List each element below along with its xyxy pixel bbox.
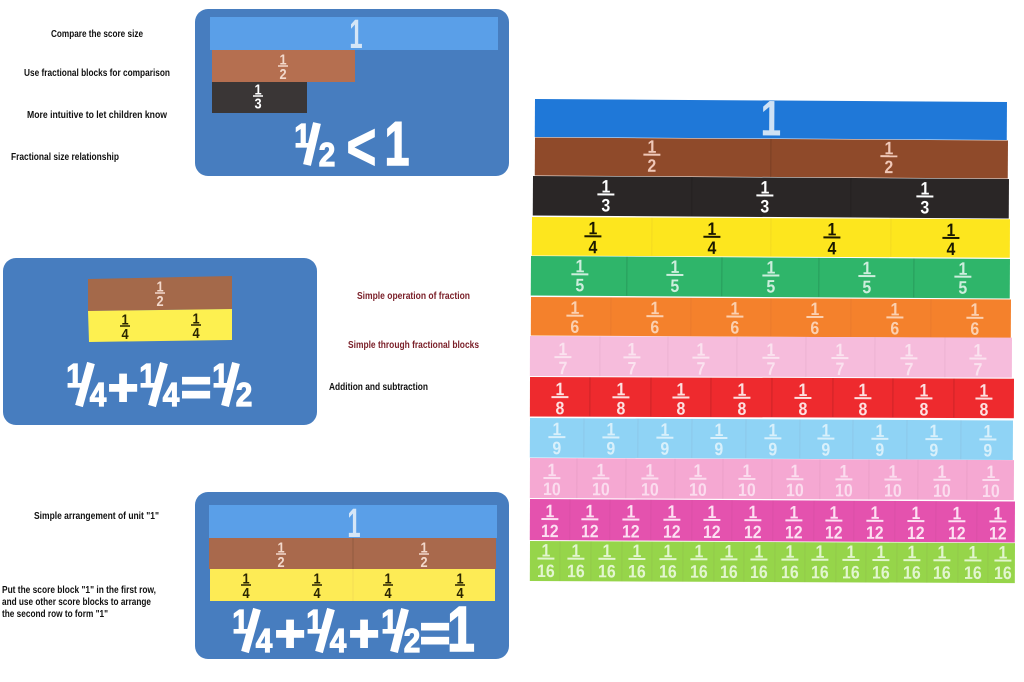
row: sixteenths: 1	[847, 542, 855, 562]
equation: sum equals one: 2	[404, 623, 420, 659]
bar: one half: 1	[279, 52, 287, 68]
row: twelfths: 12	[703, 522, 721, 542]
row: ninths: 1	[821, 421, 830, 441]
row: fifths	[531, 256, 1010, 299]
row: twelfths: 1	[789, 502, 798, 523]
row: whole	[535, 90, 1007, 148]
row: tenths: 1	[839, 461, 848, 482]
row: sixteenths: 1	[725, 541, 733, 562]
equation: sum equals one: 1	[381, 604, 398, 640]
label: more intuitive: More intuitive to let children know	[27, 110, 167, 121]
row: sixths: 1	[970, 300, 979, 320]
equation: sum equals one: +	[275, 605, 305, 663]
row: halves: 1	[884, 138, 893, 158]
row: sixteenths: 16	[690, 562, 708, 582]
equation: quarter plus quarter equals half: =	[181, 359, 211, 417]
row: sixths: 6	[890, 318, 899, 339]
row: twelfths: 1	[748, 502, 757, 522]
row: twelfths: 1	[545, 501, 554, 521]
row: ninths: 1	[875, 421, 884, 441]
bar: two quarters: 4	[121, 326, 129, 342]
row: eighths: 1	[799, 380, 807, 400]
row: sixteenths: 16	[994, 563, 1012, 583]
row: sixteenths: 16	[720, 562, 738, 582]
row: tenths: 1	[888, 462, 897, 482]
row: sixths: 1	[570, 298, 579, 318]
row: twelfths: 12	[622, 522, 640, 542]
equation: sum equals one: 1	[447, 594, 475, 665]
row: eighths: 8	[798, 399, 807, 419]
equation: half less than 1	[294, 109, 409, 184]
equation: quarter plus quarter equals half: 2	[236, 377, 252, 413]
row: sixths: 6	[650, 317, 659, 337]
row: eighths: 8	[616, 398, 625, 419]
row: ninths: 9	[929, 440, 938, 460]
bar: unit 1	[210, 13, 498, 58]
row: halves: 2	[884, 157, 893, 177]
row: ninths: 9	[768, 439, 777, 460]
row: twelfths: 12	[541, 521, 559, 541]
row: sevenths: 1	[559, 339, 567, 359]
row: sixteenths: 1	[908, 542, 916, 562]
row: sixths: 6	[970, 319, 979, 339]
row: quarters: 1	[946, 220, 955, 240]
row: ninths: 1	[929, 421, 938, 441]
row: fifths: 1	[958, 259, 967, 279]
row: thirds: 3	[920, 198, 929, 218]
row: tenths: 10	[641, 480, 659, 500]
row: tenths: 10	[786, 480, 804, 500]
equation: sum equals one	[232, 594, 475, 665]
bar: four quarters	[210, 569, 495, 601]
row: twelfths: 1	[829, 503, 838, 523]
bar: two halves: 2	[420, 554, 428, 570]
equation: half less than 1: 2	[319, 137, 335, 173]
row: twelfths: 1	[952, 503, 961, 524]
row: sixteenths: 16	[537, 561, 555, 581]
row: sixteenths: 1	[664, 541, 672, 561]
text block: arrangement instructions	[2, 585, 156, 620]
fraction blocks: full set of rows	[530, 90, 1015, 583]
row: sixteenths: 1	[877, 542, 885, 562]
row: sixteenths: 1	[603, 541, 611, 561]
row: sixteenths: 1	[695, 541, 703, 562]
row: quarters: 4	[946, 239, 956, 259]
label: simple operation: Simple operation of fraction	[357, 291, 470, 302]
bar: two halves: 1	[277, 540, 285, 556]
row: sevenths: 7	[835, 359, 844, 379]
bar: one half	[212, 50, 355, 82]
bar: one half	[88, 276, 232, 311]
bar: unit 1: 1	[349, 13, 363, 58]
bar: four quarters: 4	[456, 585, 464, 601]
panel: sum to one	[195, 492, 509, 665]
row: twelfths: 12	[785, 522, 803, 543]
row: sixteenths: 1	[542, 541, 550, 561]
label: simple through blocks: Simple through fractional blocks	[348, 340, 479, 351]
row: tenths: 1	[742, 461, 751, 481]
row: eighths: 8	[737, 399, 746, 419]
row: sixteenths	[530, 541, 1015, 583]
row: fifths: 1	[862, 258, 871, 278]
row: thirds: 1	[920, 179, 929, 199]
row: sixteenths: 1	[786, 542, 794, 562]
row: twelfths: 12	[907, 523, 925, 543]
row: eighths: 1	[677, 380, 685, 400]
row: twelfths: 1	[585, 501, 594, 522]
row: sixteenths: 16	[811, 562, 829, 583]
row: tenths: 1	[937, 462, 946, 482]
label: compare the score size: Compare the score size	[51, 29, 143, 40]
row: sixteenths: 16	[842, 562, 860, 583]
row: quarters: 1	[827, 219, 836, 240]
row: tenths: 1	[694, 461, 702, 481]
row: ninths: 1	[660, 420, 669, 440]
row: twelfths: 12	[581, 521, 599, 542]
row: twelfths: 12	[989, 523, 1007, 544]
row: whole: 1	[760, 91, 781, 147]
row: tenths: 10	[592, 479, 610, 500]
row: sixteenths: 16	[659, 562, 677, 582]
row: quarters: 4	[707, 238, 717, 258]
label: addition and subtraction: Addition and subtraction	[329, 382, 428, 393]
row: ninths: 9	[606, 438, 615, 459]
row: tenths: 10	[689, 480, 707, 500]
row: tenths: 1	[986, 462, 995, 482]
row: twelfths: 1	[911, 503, 920, 523]
row: sixteenths: 16	[598, 561, 616, 582]
equation: quarter plus quarter equals half: 1	[139, 358, 156, 394]
row: quarters	[532, 217, 1010, 259]
bar: two quarters	[88, 309, 232, 342]
row: quarters: 1	[588, 218, 597, 239]
row: ninths: 1	[983, 421, 992, 442]
bar: unit 1	[209, 502, 497, 547]
row: twelfths: 1	[626, 502, 635, 522]
row: eighths: 1	[617, 379, 625, 400]
row: sevenths: 1	[836, 340, 844, 360]
row: ninths: 1	[714, 420, 723, 440]
bar: two quarters: 1	[192, 311, 200, 327]
row: tenths: 10	[933, 481, 951, 501]
bar: four quarters: 1	[242, 571, 250, 587]
row: sevenths: 1	[974, 341, 982, 361]
bar: one third: 3	[254, 96, 262, 112]
bar: four quarters: 4	[384, 585, 392, 601]
row: sixteenths: 1	[633, 541, 641, 561]
bar: one third: 1	[254, 82, 262, 98]
row: sevenths: 1	[905, 340, 913, 361]
row: sixths: 6	[730, 318, 739, 338]
row: sevenths: 1	[628, 339, 636, 360]
row: sixteenths: 16	[750, 562, 768, 582]
bar: one third	[212, 82, 307, 113]
row: twelfths: 12	[948, 523, 966, 544]
equation: sum equals one: =	[420, 605, 450, 663]
text block: arrangement instructions: Put the score block "1" in the first row,	[2, 585, 156, 596]
equation: sum equals one: 1	[306, 604, 323, 640]
row: twelfths: 12	[866, 523, 884, 543]
bar: four quarters: 1	[456, 571, 464, 587]
row: sixths	[531, 297, 1011, 339]
row: twelfths: 12	[744, 522, 762, 542]
row: quarters: 4	[588, 237, 598, 258]
row: sixths: 1	[730, 299, 739, 319]
row: sixteenths: 1	[755, 542, 763, 562]
row: thirds: 3	[601, 196, 610, 216]
equation: quarter plus quarter equals half: +	[108, 359, 138, 417]
bar: one half: 2	[156, 293, 164, 309]
row: fifths: 5	[862, 277, 871, 297]
equation: half less than 1: 1	[294, 118, 311, 154]
panel: quarter plus quarter	[3, 258, 317, 425]
row: sevenths: 7	[766, 359, 775, 379]
row: sixteenths: 16	[567, 561, 585, 581]
row: sixteenths: 1	[938, 542, 946, 563]
row: sixteenths: 1	[999, 543, 1007, 563]
row: quarters: 1	[707, 219, 716, 239]
row: sixteenths: 1	[816, 542, 824, 562]
row: twelfths: 12	[663, 522, 681, 542]
row: thirds: 1	[601, 177, 610, 197]
text block: arrangement instructions: and use other score blocks to arrange	[2, 597, 151, 608]
row: sixteenths: 16	[628, 562, 646, 582]
row: sixteenths: 1	[969, 542, 977, 563]
row: fifths: 5	[958, 278, 967, 298]
row: eighths	[530, 377, 1014, 420]
equation: sum equals one: 4	[330, 623, 347, 659]
row: fifths: 1	[766, 258, 775, 278]
equation: sum equals one: 4	[256, 623, 273, 659]
row: fifths: 1	[575, 256, 584, 277]
row: ninths	[530, 418, 1013, 461]
equation: sum equals one: 1	[232, 604, 249, 640]
bar: four quarters: 1	[313, 571, 321, 587]
row: tenths: 10	[884, 481, 902, 501]
text block: arrangement instructions: the second row to form "1"	[2, 609, 108, 620]
row: tenths: 1	[790, 461, 799, 481]
equation: half less than 1: <	[346, 109, 377, 184]
row: tenths: 10	[835, 480, 853, 501]
row: ninths: 9	[552, 438, 561, 458]
row: sixteenths: 16	[903, 563, 921, 583]
row: quarters: 4	[827, 238, 837, 259]
row: eighths: 1	[980, 381, 988, 401]
bar: four quarters: 4	[242, 585, 250, 601]
row: sevenths: 7	[558, 358, 567, 378]
row: fifths: 5	[766, 277, 775, 297]
row: sevenths: 7	[696, 359, 705, 379]
row: tenths: 10	[982, 481, 1000, 501]
row: eighths: 8	[555, 398, 564, 418]
row: tenths: 1	[548, 460, 556, 480]
row: sixths: 6	[570, 317, 579, 337]
row: sevenths: 7	[627, 358, 636, 379]
row: sevenths: 1	[697, 340, 705, 360]
row: fifths: 5	[575, 275, 584, 296]
row: tenths: 10	[543, 479, 561, 499]
label: use fractional blocks: Use fractional blocks for comparison	[24, 68, 170, 79]
row: twelfths: 1	[667, 502, 676, 522]
row: eighths: 8	[858, 399, 867, 419]
panel: one half less than one	[195, 9, 509, 184]
row: eighths: 8	[919, 399, 928, 420]
row: eighths: 8	[676, 399, 685, 419]
row: sevenths	[530, 336, 1012, 380]
row: ninths: 9	[660, 439, 669, 459]
row: twelfths	[530, 499, 1015, 544]
row: tenths	[530, 458, 1014, 501]
row: ninths: 1	[552, 419, 561, 439]
equation: half less than 1: 1	[385, 110, 409, 179]
label: fractional size relationship: Fractional size relationship	[11, 152, 119, 163]
row: sixths: 1	[810, 299, 819, 319]
equation: quarter plus quarter equals half: 1	[212, 358, 229, 394]
equation: sum equals one: +	[349, 605, 379, 663]
row: sixteenths: 16	[964, 563, 982, 583]
row: halves: 2	[647, 156, 656, 176]
row: sixths: 6	[810, 318, 819, 338]
row: ninths: 9	[821, 440, 830, 460]
row: tenths: 1	[597, 460, 605, 481]
row: halves: 1	[647, 137, 656, 157]
row: twelfths: 1	[707, 502, 716, 522]
row: thirds	[533, 176, 1009, 218]
row: thirds: 1	[760, 178, 769, 198]
row: fifths: 1	[670, 257, 679, 277]
bar: two quarters: 1	[121, 312, 129, 328]
row: sevenths: 7	[904, 359, 913, 380]
row: ninths: 9	[875, 440, 884, 460]
bar: two quarters: 4	[192, 325, 200, 341]
row: sevenths: 7	[973, 360, 982, 380]
row: sixteenths: 16	[872, 563, 890, 583]
row: fifths: 5	[670, 276, 679, 296]
row: eighths: 1	[920, 380, 928, 401]
equation: quarter plus quarter equals half: 1	[66, 358, 83, 394]
bar: two halves	[209, 538, 496, 570]
bar: four quarters: 1	[384, 571, 392, 587]
row: twelfths: 1	[993, 504, 1002, 524]
row: tenths: 10	[738, 480, 756, 500]
row: sixths: 1	[890, 299, 899, 320]
equation: quarter plus quarter equals half	[66, 358, 252, 417]
bar: one half: 1	[156, 279, 164, 295]
row: sixteenths: 16	[781, 562, 799, 582]
row: ninths: 9	[714, 439, 723, 459]
row: eighths: 1	[556, 379, 564, 399]
row: sevenths: 1	[767, 340, 775, 360]
row: eighths: 1	[859, 380, 867, 400]
row: halves	[535, 136, 1008, 178]
row: twelfths: 1	[870, 503, 879, 523]
bar: four quarters: 4	[313, 585, 321, 601]
equation: quarter plus quarter equals half: 4	[163, 377, 180, 413]
row: eighths: 1	[738, 380, 746, 400]
row: ninths: 1	[606, 419, 615, 440]
row: ninths: 1	[768, 420, 777, 441]
bar: unit 1: 1	[347, 502, 361, 547]
bar: two halves: 2	[277, 554, 285, 570]
row: sixteenths: 1	[572, 541, 580, 561]
row: ninths: 9	[983, 440, 992, 461]
row: sixths: 1	[650, 298, 659, 318]
row: eighths: 8	[979, 400, 988, 420]
label: simple arrangement: Simple arrangement of unit "1"	[34, 511, 159, 522]
row: tenths: 1	[646, 461, 654, 481]
row: thirds: 3	[760, 197, 769, 217]
bar: two halves: 1	[420, 540, 428, 556]
row: twelfths: 12	[825, 523, 843, 543]
bar: one half: 2	[279, 66, 287, 82]
equation: quarter plus quarter equals half: 4	[90, 377, 107, 413]
row: sixteenths: 16	[933, 563, 951, 583]
